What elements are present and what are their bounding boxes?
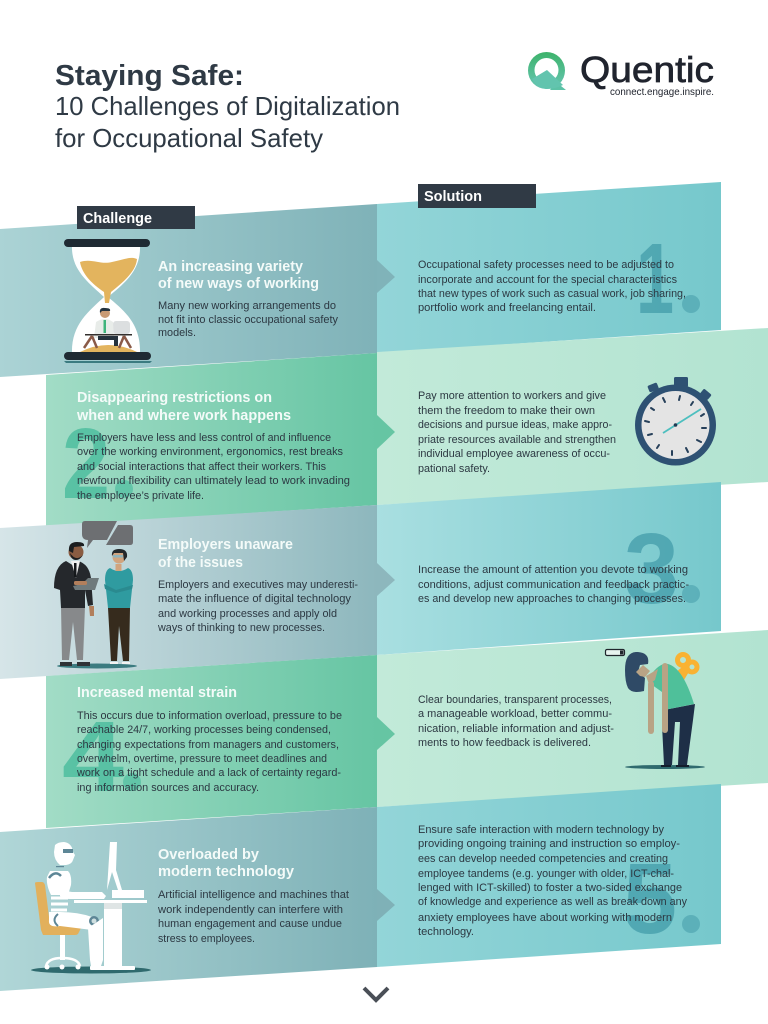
tag: Solution: Solution xyxy=(424,189,482,205)
arrow 5 xyxy=(377,889,395,921)
icon: stopwatch xyxy=(635,377,716,466)
number 3: 3 xyxy=(624,513,679,625)
solution text: incorporate and account for the special characteristics xyxy=(418,274,677,286)
challenge text xyxy=(158,300,338,339)
solution text: employee tandems (e.g. younger with older, ICT-chal- xyxy=(418,868,674,880)
panel: row 4 xyxy=(46,630,768,828)
solution text xyxy=(418,564,689,605)
challenge text: work on a tight schedule and a lack of certainty regard- xyxy=(76,767,341,779)
challenge text: newfound flexibility can ultimately lead to work invading xyxy=(77,475,350,487)
tag: Challenge: Challenge xyxy=(83,211,152,227)
arrow 1 xyxy=(377,260,395,293)
icon: tired person with wind-up key xyxy=(606,650,705,769)
solution text: providing ongoing training and instruction so employ- xyxy=(418,838,680,850)
solution text xyxy=(418,694,614,749)
heading: Disappearing restrictions on xyxy=(77,389,272,406)
solution band 5 xyxy=(377,784,721,967)
solution text: Pay more attention to workers and give xyxy=(418,390,606,402)
logo: Quentic: Quentic xyxy=(580,49,714,90)
arrow 4 xyxy=(377,717,395,750)
challenge text xyxy=(76,710,342,794)
challenge text: models. xyxy=(158,327,196,339)
solution text: Occupational safety processes need to be adjusted to xyxy=(418,259,674,271)
challenge text: ways of thinking to new processes. xyxy=(157,622,325,634)
arrow 2 xyxy=(377,415,395,449)
challenge text: mate the influence of digital technology xyxy=(158,593,351,605)
challenge band 5 xyxy=(0,807,377,991)
solution text: es and develop new approaches to changing processes. xyxy=(418,593,686,605)
solution text: Increase the amount of attention you devote to working xyxy=(418,564,688,576)
challenge text: Artificial intelligence and machines that xyxy=(158,889,350,901)
logo: Quentic: connect.engage.inspire. xyxy=(610,86,714,98)
solution band 3 xyxy=(377,482,721,655)
solution text: lenged with ICT-skilled) to foster a two-sided exchange xyxy=(418,882,682,894)
challenge text xyxy=(157,579,358,634)
icon: robot at a desk xyxy=(31,842,151,974)
solution text: technology. xyxy=(418,926,474,938)
title: for Occupational Safety xyxy=(55,123,323,153)
challenge text: changing expectations from managers and customers, xyxy=(77,739,339,751)
challenge text: stress to employees. xyxy=(158,933,255,945)
icon: hourglass xyxy=(64,239,152,363)
heading line 2: of the issues xyxy=(158,554,243,571)
solution text: conditions, adjust communication and feedback practic- xyxy=(418,579,689,591)
number 2: 2 xyxy=(62,408,110,520)
solution text: anxiety employees have about working with modern xyxy=(418,912,672,924)
logo: Quentic xyxy=(528,49,714,98)
solution text: priate resources available and strengthen xyxy=(418,434,616,446)
heading: An increasing variety xyxy=(158,258,304,275)
challenge text: This occurs due to information overload, pressure to be xyxy=(77,710,342,722)
solution text: pational safety. xyxy=(418,463,490,475)
heading: Overloaded by xyxy=(158,846,260,863)
tag: Challenge xyxy=(77,206,195,229)
solution band 4 xyxy=(377,630,768,807)
arrow: next page chevron xyxy=(364,988,388,1000)
solution text xyxy=(418,390,616,475)
challenge text: work independently can interfere with xyxy=(157,904,343,916)
challenge band 2 xyxy=(46,353,377,526)
challenge text: ing information sources and accuracy. xyxy=(77,782,259,794)
solution text: that new types of work such as casual work, job sharing, xyxy=(418,288,686,300)
solution text: ments to how feedback is delivered. xyxy=(418,737,591,749)
panel: row 1 xyxy=(0,182,721,377)
heading line 2: modern technology xyxy=(158,863,295,880)
challenge text: Many new working arrangements do xyxy=(158,300,336,312)
challenge text: not fit into classic occupational safety xyxy=(158,314,338,326)
solution band 2 xyxy=(377,328,768,505)
title xyxy=(55,60,400,153)
challenge text: over the working environment, ergonomics, rest breaks xyxy=(77,446,343,458)
challenge text: and working processes and apply old xyxy=(158,608,337,620)
heading line 2: of new ways of working xyxy=(158,275,319,292)
solution text: portfolio work and freelancing entail. xyxy=(418,302,596,314)
arrow 3 xyxy=(377,563,395,596)
challenge text xyxy=(157,889,350,945)
challenge text: Employers and executives may underesti- xyxy=(158,579,358,591)
challenge text: Employers have less and less control of and influence xyxy=(77,432,331,444)
heading: Employers unaware xyxy=(158,536,293,553)
panel: row 3 xyxy=(0,482,721,679)
solution text: Clear boundaries, transparent processes, xyxy=(418,694,612,706)
solution band 1 xyxy=(377,182,721,353)
solution text: decisions and pursue ideas, make appro- xyxy=(418,419,612,431)
solution text: ees can develop needed competencies and creating xyxy=(418,853,668,865)
number 1: 1 xyxy=(636,223,674,335)
challenge text: the employee’s private life. xyxy=(77,490,204,502)
tag: Solution xyxy=(418,184,536,208)
panel: row 5 xyxy=(0,784,721,991)
challenge text: and social interactions that affect their workers. This xyxy=(77,461,326,473)
number 4: 4 xyxy=(62,701,124,813)
challenge text xyxy=(77,432,350,502)
solution text xyxy=(418,824,687,938)
solution text xyxy=(418,259,686,314)
heading: Increased mental strain xyxy=(77,684,237,701)
heading line 2: when and where work happens xyxy=(76,407,291,424)
title: 10 Challenges of Digitalization xyxy=(55,91,400,121)
solution text: individual employee awareness of occu- xyxy=(418,448,610,460)
challenge band 1 xyxy=(0,204,377,377)
title: Staying Safe: xyxy=(55,60,244,92)
icon: two people talking xyxy=(54,521,137,668)
solution text: Ensure safe interaction with modern technology by xyxy=(418,824,664,836)
challenge text: human engagement and cause undue xyxy=(158,918,342,930)
challenge text: overwhelm, overtime, pressure to meet deadlines and xyxy=(77,753,327,765)
solution text: a manageable workload, better commu- xyxy=(418,708,612,720)
number 5: 5 xyxy=(623,843,677,955)
challenge band 4 xyxy=(46,655,377,828)
panel: row 2 xyxy=(46,328,768,526)
solution text: of knowledge and experience as well as break down any xyxy=(418,896,687,908)
challenge band 3 xyxy=(0,505,377,679)
solution text: nication, reliable information and adjust- xyxy=(418,723,614,735)
challenge text: reachable 24/7, working processes being condensed, xyxy=(77,724,331,736)
solution text: them the freedom to make their own xyxy=(418,405,595,417)
